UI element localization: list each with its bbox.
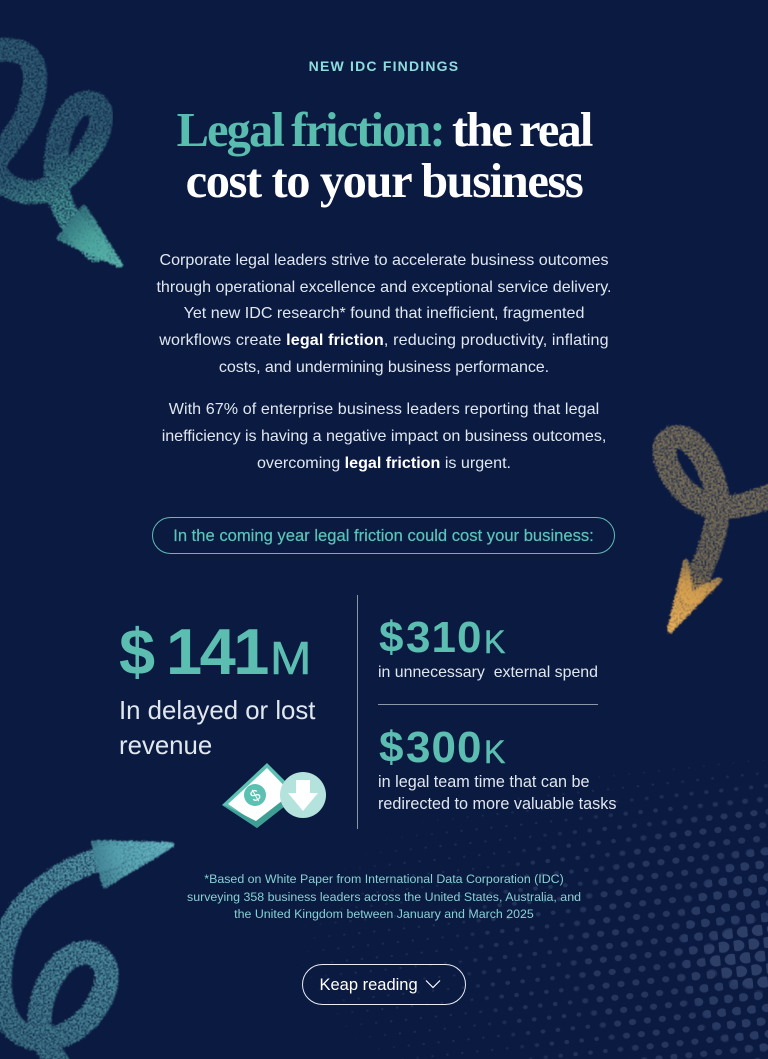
- label: revenue: [119, 732, 212, 760]
- title: cost to your business: [186, 155, 582, 208]
- value: [379, 613, 506, 662]
- label: In delayed or lost: [119, 697, 315, 725]
- urgency paragraph: overcoming legal friction is urgent.: [257, 454, 511, 472]
- stat: 310K external spend: [378, 613, 598, 681]
- value: 300: [406, 723, 482, 772]
- value: K: [484, 734, 505, 770]
- label: redirected to more valuable tasks: [378, 795, 616, 813]
- footnote: the United Kingdom between January and March 2025: [234, 907, 534, 921]
- value: 310: [406, 613, 482, 662]
- intro paragraph: through operational excellence and exceptional service delivery.: [156, 278, 612, 296]
- intro paragraph: Yet new IDC research* found that inefficient, fragmented: [184, 304, 584, 322]
- callout pill: [152, 517, 615, 554]
- urgency paragraph: inefficiency is having a negative impact on business outcomes,: [162, 427, 606, 445]
- arrow head: teal: [60, 208, 120, 265]
- value: $: [379, 613, 403, 662]
- button label: Keap reading: [320, 976, 418, 994]
- horizontal divider: [378, 704, 598, 705]
- intro paragraph: Corporate legal leaders strive to accelerate business outcomes: [159, 251, 609, 269]
- title: Legal friction: the real: [177, 104, 591, 157]
- stat: 300K legal team time: [378, 723, 616, 813]
- footnote: *Based on White Paper from International Data Corporation (IDC): [204, 872, 564, 886]
- arrow: bottom left blue: [0, 843, 171, 1059]
- stat: 141M revenue: [119, 614, 316, 760]
- intro paragraph: [156, 251, 612, 376]
- value: M: [270, 632, 311, 684]
- value: 141: [166, 614, 267, 688]
- arrow: top left teal: [0, 50, 120, 265]
- icon: money with down arrow: [222, 763, 326, 828]
- value: [119, 614, 311, 688]
- vertical divider: [356, 595, 358, 829]
- label: in unnecessary external spend: [378, 664, 598, 681]
- label: [378, 773, 616, 813]
- callout pill: In the coming year legal friction could cost your business:: [173, 526, 594, 545]
- label: [119, 697, 316, 760]
- eyebrow: NEW IDC FINDINGS: [309, 58, 459, 74]
- intro paragraph: workflows create legal friction, reducing productivity, inflating: [159, 331, 609, 349]
- arrow head: blue: [94, 843, 171, 885]
- icon: money with down arrow: $: [248, 787, 264, 806]
- footnote: surveying 358 business leaders across the United States, Australia, and: [187, 890, 581, 904]
- label: in legal team time that can be: [378, 773, 589, 791]
- intro paragraph: costs, and undermining business performance.: [219, 358, 549, 376]
- title: [177, 104, 593, 208]
- urgency paragraph: With 67% of enterprise business leaders reporting that legal: [169, 400, 599, 418]
- value: K: [484, 624, 505, 660]
- value: $: [119, 614, 155, 688]
- footnote: [187, 872, 581, 921]
- icon: chevron: [426, 980, 440, 988]
- arrow head: orange: [670, 562, 719, 630]
- urgency paragraph: [162, 400, 606, 472]
- arrow: right orange: [665, 437, 768, 630]
- button: keep reading: [302, 964, 466, 1005]
- halftone dots: [290, 760, 768, 1059]
- value: [379, 723, 506, 772]
- value: $: [379, 723, 403, 772]
